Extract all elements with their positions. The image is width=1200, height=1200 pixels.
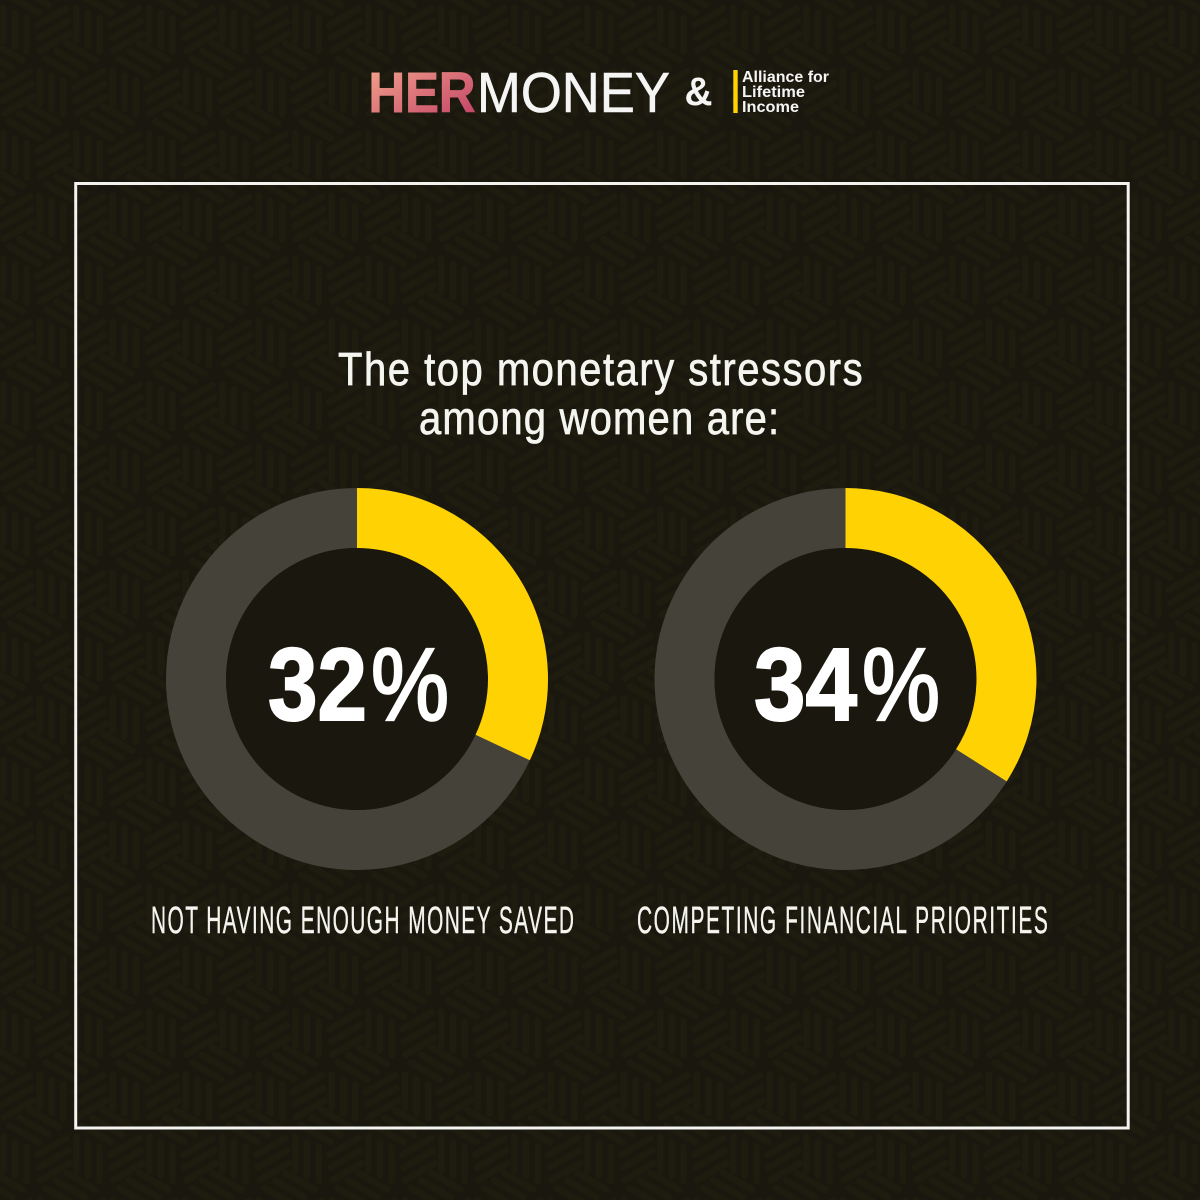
logo: Alliance for Lifetime Income: Lifetime <box>742 84 805 101</box>
value: 34% <box>754 627 940 742</box>
logo: Alliance for Lifetime Income: Alliance for <box>742 69 829 86</box>
heading: The top monetary stressors <box>338 344 863 396</box>
donut chart: 34% <box>684 518 1006 840</box>
logos header <box>368 61 829 125</box>
logo: Alliance for Lifetime Income <box>733 69 829 116</box>
value: 32% <box>268 627 449 742</box>
label: competing financial priorities: COMPETING FINANCIAL PRIORITIES <box>637 900 1048 942</box>
white frame <box>76 184 1128 1128</box>
value: 34%: 34 <box>754 627 857 742</box>
heading <box>338 344 863 445</box>
logo: HerMoney: MONEY <box>477 61 670 125</box>
logo: HerMoney <box>368 61 670 125</box>
donut chart: 32% <box>196 518 518 840</box>
heading: among women are: <box>419 393 779 445</box>
value: 32%: % <box>371 627 449 742</box>
label: not having enough money saved: NOT HAVING ENOUGH MONEY SAVED <box>151 900 574 942</box>
logo: HerMoney: HER <box>368 61 476 125</box>
value: 32%: 32 <box>268 627 367 742</box>
logo: Alliance for Lifetime Income: Income <box>742 99 799 116</box>
ampersand: & <box>684 70 712 114</box>
value: 34%: % <box>862 627 940 742</box>
